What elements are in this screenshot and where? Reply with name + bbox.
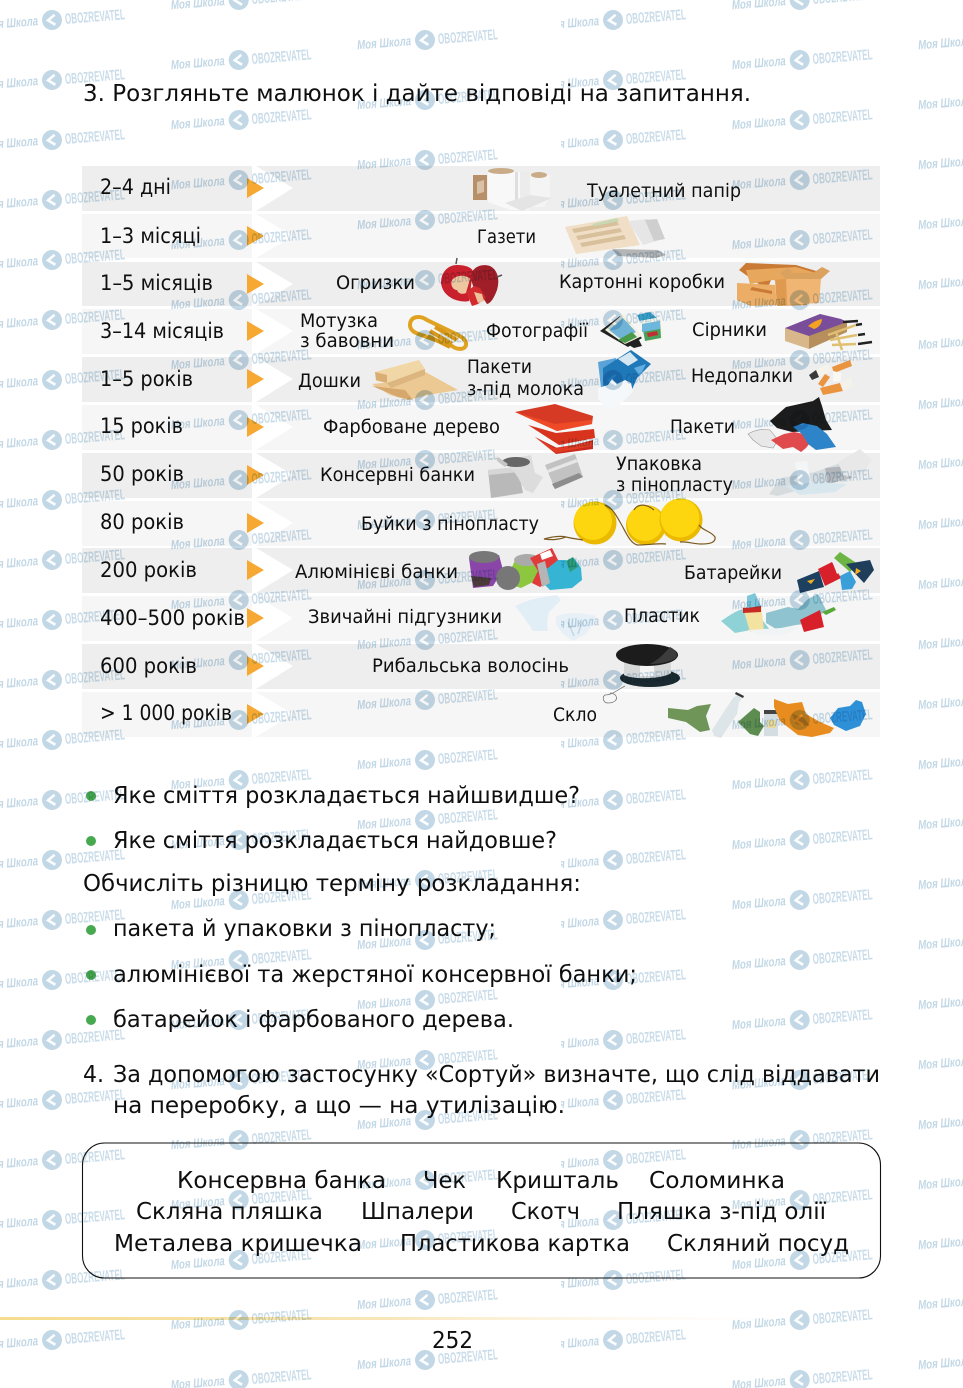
questions list: Яке сміття розкладається найшвидше?: [113, 781, 580, 809]
questions list: батарейок і фарбованого дерева.: [113, 1005, 514, 1033]
item labels: з-під молока: [467, 378, 584, 400]
item labels: Упаковка: [616, 453, 702, 475]
questions list: Яке сміття розкладається найдовше?: [113, 826, 557, 854]
questions list: пакета й упаковки з пінопласту;: [113, 914, 496, 942]
icon: diapers: [515, 595, 596, 641]
questions list: алюмінієвої та жерстяної консервної банки;: [113, 960, 637, 988]
time labels: 15 років: [100, 414, 183, 438]
item labels: Буйки з пінопласту: [361, 513, 539, 535]
word box: Консервна банка: [177, 1166, 386, 1194]
word box: Металева кришечка: [114, 1229, 362, 1257]
icon: plastic bags: [748, 397, 836, 452]
decomposition time table: [82, 166, 880, 738]
item labels: з бавовни: [300, 330, 394, 352]
word box: Скотч: [511, 1197, 580, 1225]
time labels: 200 років: [100, 558, 197, 582]
time labels: 50 років: [100, 462, 184, 486]
icon: styrofoam packaging: [769, 449, 872, 496]
item labels: з пінопласту: [616, 474, 733, 496]
item labels: Консервні банки: [320, 464, 475, 486]
time labels: 3–14 місяців: [100, 319, 224, 343]
item labels: Пакети: [467, 356, 532, 378]
item labels: Фотографії: [486, 320, 589, 342]
questions list: Обчисліть різницю терміну розкладання:: [83, 869, 581, 897]
item labels: Пакети: [670, 416, 735, 438]
item labels: Фарбоване дерево: [323, 416, 500, 438]
icon: toilet paper: [473, 168, 552, 211]
icon: foam buoys: [544, 498, 715, 545]
item labels: [295, 180, 793, 726]
page number: 252: [432, 1326, 473, 1354]
time labels: 1–5 років: [100, 367, 193, 391]
item labels: Батарейки: [684, 562, 782, 584]
icon: matches: [785, 314, 872, 350]
item labels: Огризки: [336, 272, 415, 294]
time labels: 1–5 місяців: [100, 271, 213, 295]
item labels: Газети: [477, 226, 536, 248]
word box: Скляна пляшка: [136, 1197, 323, 1225]
icon: rope: [410, 317, 466, 349]
orange arrows: [247, 178, 264, 724]
icon: cans: [488, 454, 583, 498]
icon: photos: [600, 312, 663, 348]
word box: Пластикова картка: [400, 1229, 630, 1257]
icon: glass waste: [668, 692, 866, 738]
task 4 text: на переробку, а що — на утилізацію.: [113, 1091, 565, 1119]
bullet: [86, 791, 96, 801]
time labels: > 1 000 років: [100, 701, 232, 725]
item labels: Мотузка: [300, 310, 378, 332]
icon: batteries: [797, 552, 874, 593]
icon: fishing line spool: [603, 644, 680, 703]
time labels: 400–500 років: [100, 606, 245, 630]
word box: Кришталь: [496, 1166, 619, 1194]
icon: painted wood: [515, 404, 595, 454]
item labels: Картонні коробки: [559, 271, 725, 293]
item labels: Недопалки: [691, 365, 793, 387]
time labels: 2–4 дні: [100, 175, 171, 199]
word box: Соломинка: [649, 1166, 785, 1194]
task 4 text: 4.: [83, 1060, 104, 1088]
item labels: Звичайні підгузники: [308, 606, 502, 628]
icon: milk cartons: [598, 350, 651, 409]
icon: boards: [372, 360, 458, 400]
word box: Шпалери: [361, 1197, 474, 1225]
item labels: Сірники: [692, 319, 767, 341]
item labels: Пластик: [624, 605, 700, 627]
heading: task 3: 3. Розгляньте малюнок і дайте відповіді на запитання.: [83, 79, 751, 107]
icon: cigarette butts: [809, 360, 853, 395]
item labels: Дошки: [298, 370, 361, 392]
item labels: Алюмінієві банки: [295, 561, 458, 583]
task 4 text: [83, 1060, 880, 1119]
item labels: Туалетний папір: [586, 180, 741, 202]
icon: aluminium cans: [469, 548, 582, 590]
time labels: 80 років: [100, 510, 184, 534]
questions list: [83, 781, 637, 1033]
icon: newspapers: [565, 216, 666, 258]
word box: Чек: [423, 1166, 466, 1194]
word box: [82, 1143, 880, 1278]
word box: Пляшка з-під олії: [617, 1197, 826, 1225]
icon: apple cores: [441, 258, 502, 306]
word box: Скляний посуд: [667, 1229, 849, 1257]
time labels: 600 років: [100, 654, 197, 678]
icon: cardboard boxes: [737, 263, 830, 306]
time labels: 1–3 місяці: [100, 224, 201, 248]
item labels: Скло: [553, 704, 597, 726]
item labels: Рибальська волосінь: [372, 655, 569, 677]
task 4 text: За допомогою застосунку «Сортуй» визначте, що слід віддавати: [113, 1060, 880, 1088]
icon: plastic waste: [721, 593, 836, 635]
time labels: [100, 175, 245, 725]
